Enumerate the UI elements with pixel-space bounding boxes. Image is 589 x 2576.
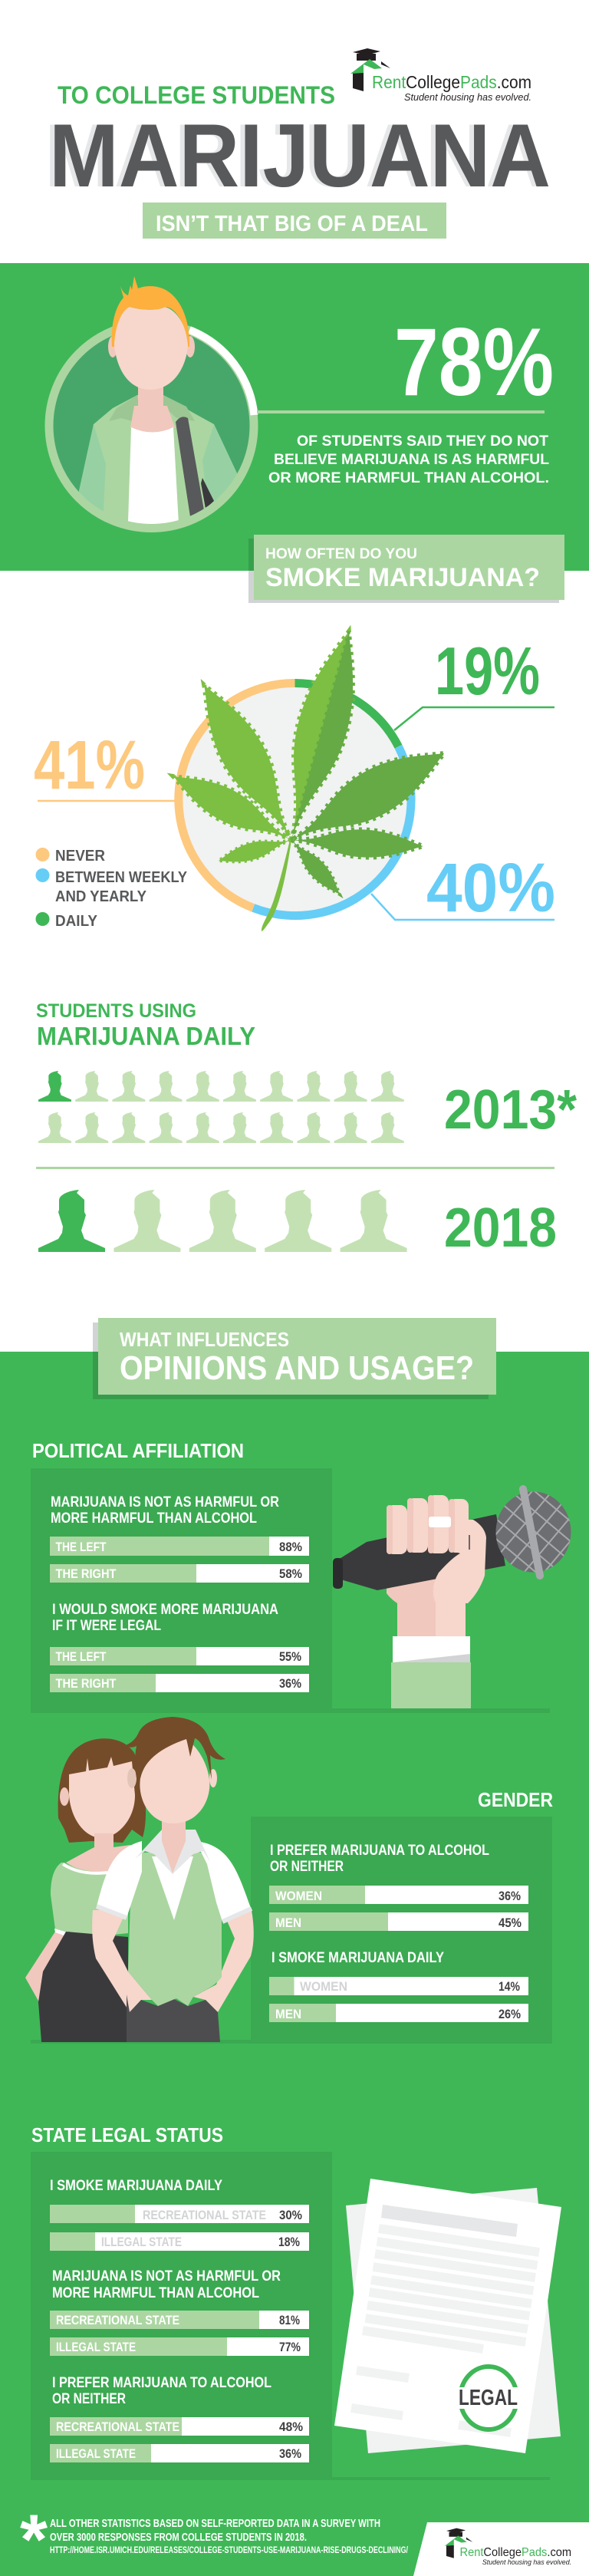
bar: the left 88: 88% <box>279 1540 302 1554</box>
bar: men 45: MEN <box>275 1916 301 1930</box>
pictogram: 2013 one in twenty <box>38 1071 404 1143</box>
stat description: OR MORE HARMFUL THAN ALCOHOL. <box>268 469 549 486</box>
panel: political affiliation <box>31 1439 571 1713</box>
donut segments <box>179 683 411 916</box>
bar: illegal 18 <box>50 2232 309 2251</box>
footer notes <box>20 2501 589 2576</box>
question text: I WOULD SMOKE MORE MARIJUANA <box>52 1602 278 1618</box>
figure: woman <box>25 1738 146 2042</box>
legend: NEVER <box>55 848 106 865</box>
callout: 19% daily <box>394 633 554 730</box>
question text <box>52 1602 278 1634</box>
bar: illegal 77: 77% <box>279 2340 301 2354</box>
bar: men 26: MEN <box>275 2007 301 2021</box>
section banner: what influences: WHAT INFLUENCES <box>120 1328 289 1351</box>
source text: OVER 3000 RESPONSES FROM COLLEGE STUDENTS IN 2018. <box>50 2531 307 2544</box>
bar: illegal 36 <box>50 2444 309 2462</box>
bar: the right 36: 36% <box>279 1676 301 1691</box>
bar: the right 36 <box>50 1674 309 1692</box>
legend <box>35 848 188 930</box>
section banner: what influences <box>93 1318 496 1399</box>
bar: men 26 <box>269 2004 528 2022</box>
bar: the left 88: THE LEFT <box>55 1540 107 1554</box>
question text: I PREFER MARIJUANA TO ALCOHOL <box>52 2375 271 2391</box>
heading: STATE LEGAL STATUS <box>31 2123 223 2146</box>
logo wordmark: RentCollegePads.com <box>372 72 531 92</box>
callout: 40% between weekly and yearly: 40% <box>426 850 555 927</box>
stamp: LEGAL: LEGAL <box>459 2386 518 2410</box>
bar: illegal 77: ILLEGAL STATE <box>56 2340 136 2354</box>
bar: women 36 <box>269 1886 528 1904</box>
bar: illegal 77 <box>50 2337 309 2356</box>
bar: men 26: 26% <box>499 2007 521 2021</box>
bar: illegal 36: 36% <box>279 2446 301 2461</box>
bar: women 36: 36% <box>499 1889 521 1903</box>
big stat 78%: 78% <box>394 309 554 416</box>
year label 2018: 2018 <box>444 1197 557 1259</box>
section banner: how often: HOW OFTEN DO YOU <box>265 546 417 562</box>
year label 2013: 2013* <box>444 1079 577 1141</box>
legend: BETWEEN WEEKLY <box>55 869 188 886</box>
stat description: BELIEVE MARIJUANA IS AS HARMFUL <box>274 451 549 468</box>
question text: OR NEITHER <box>52 2391 126 2407</box>
callout: 40% between weekly and yearly <box>371 850 555 927</box>
question text <box>52 2375 271 2407</box>
eyebrow heading: TO COLLEGE STUDENTS <box>58 81 335 109</box>
question text: I PREFER MARIJUANA TO ALCOHOL <box>270 1843 489 1859</box>
bar: the left 55: THE LEFT <box>55 1649 107 1664</box>
panel: state legal status <box>31 2123 561 2480</box>
section banner: what influences: OPINIONS AND USAGE? <box>120 1349 474 1387</box>
bar: recreational 30: 30% <box>279 2208 302 2222</box>
question text <box>51 1494 279 1527</box>
illustration: legal documents <box>334 2179 561 2453</box>
source text: HTTP://HOME.ISR.UMICH.EDU/RELEASES/COLLEGE-STUDENTS-USE-MARIJUANA-RISE-DRUGS-DECLINING/ <box>50 2546 409 2555</box>
bar: illegal 36: ILLEGAL STATE <box>56 2446 136 2461</box>
heading: POLITICAL AFFILIATION <box>32 1439 244 1462</box>
panel: 78% green section <box>0 263 589 571</box>
main title: MARIJUANA <box>44 105 546 206</box>
illustration: fist holding microphone <box>333 1489 571 1708</box>
stat description: OF STUDENTS SAID THEY DO NOT <box>297 433 548 450</box>
source text <box>50 2517 409 2555</box>
bar: the right 58: 58% <box>279 1566 302 1581</box>
bar: the left 55: 55% <box>279 1649 301 1664</box>
bar: illegal 18: ILLEGAL STATE <box>101 2235 182 2249</box>
illustration: woman and man <box>25 1717 254 2042</box>
heading: STUDENTS USING <box>36 1000 196 1022</box>
bar: women 36: WOMEN <box>275 1889 322 1903</box>
bar: men 45: 45% <box>499 1916 522 1930</box>
heading: GENDER <box>478 1788 553 1811</box>
icon: cannabis leaf <box>166 625 456 931</box>
header section <box>44 48 551 239</box>
question text <box>270 1843 489 1875</box>
subtitle banner <box>143 203 446 239</box>
bar: women 14: 14% <box>499 1979 520 1994</box>
illustration: student portrait <box>49 276 255 537</box>
bar: men 45 <box>269 1912 528 1931</box>
bar: recreational 30: RECREATIONAL STATE <box>143 2208 266 2222</box>
heading: MARIJUANA DAILY <box>37 1022 255 1050</box>
bar: recreational 48: 48% <box>279 2420 303 2434</box>
section banner: how often: SMOKE MARIJUANA? <box>265 563 540 592</box>
chart: donut with cannabis leaf <box>34 625 555 931</box>
question text: MARIJUANA IS NOT AS HARMFUL OR <box>52 2268 281 2284</box>
footer logo block <box>413 2522 589 2576</box>
callout: 19% daily: 19% <box>435 633 540 709</box>
callout: 41% never: 41% <box>34 727 145 804</box>
stat description <box>268 433 549 486</box>
bar: recreational 81 <box>50 2311 309 2329</box>
question text: IF IT WERE LEGAL <box>52 1618 161 1634</box>
question text: I SMOKE MARIJUANA DAILY <box>271 1950 444 1966</box>
question text: OR NEITHER <box>270 1859 344 1875</box>
main title: MARIJUANA <box>49 105 551 206</box>
bar: recreational 81: 81% <box>279 2313 300 2327</box>
bar: women 14: WOMEN <box>300 1979 347 1994</box>
legend: DAILY <box>55 913 98 930</box>
bar: the left 88 <box>50 1537 309 1556</box>
question text: MORE HARMFUL THAN ALCOHOL <box>51 1510 257 1527</box>
logo tagline: Student housing has evolved. <box>404 91 531 103</box>
bar: recreational 81: RECREATIONAL STATE <box>56 2313 179 2327</box>
question text: MORE HARMFUL THAN ALCOHOL <box>52 2285 259 2301</box>
bar: the right 58: THE RIGHT <box>55 1566 117 1581</box>
bar: recreational 48 <box>50 2417 309 2436</box>
question text: I SMOKE MARIJUANA DAILY <box>50 2178 222 2194</box>
question text <box>52 2268 281 2301</box>
bar: the right 58 <box>50 1564 309 1583</box>
source text: ALL OTHER STATISTICS BASED ON SELF-REPORTED DATA IN A SURVEY WITH <box>50 2517 380 2530</box>
bar: the left 55 <box>50 1647 309 1665</box>
logo: RentCollegePads <box>350 48 531 103</box>
subtitle banner: ISN’T THAT BIG OF A DEAL <box>156 212 428 236</box>
heading <box>36 1000 255 1050</box>
footer logo block: Student housing has evolved. <box>482 2558 571 2566</box>
stamp: LEGAL <box>456 2367 521 2429</box>
footer logo block: RentCollegePads.com <box>459 2545 571 2559</box>
pictogram: 2018 one in five <box>38 1190 407 1252</box>
panel: gender <box>25 1717 553 2044</box>
section: students using marijuana daily <box>36 1000 577 1259</box>
question text: MARIJUANA IS NOT AS HARMFUL OR <box>51 1494 279 1510</box>
legend: AND YEARLY <box>55 888 147 905</box>
bar: women 14 <box>269 1977 528 1995</box>
figure: man <box>92 1717 254 2042</box>
section banner: how often <box>248 535 564 603</box>
bar: recreational 48: RECREATIONAL STATE <box>56 2420 179 2434</box>
bar: the right 36: THE RIGHT <box>55 1676 117 1691</box>
bar: recreational 30 <box>50 2205 309 2223</box>
icon: graduation cap house <box>350 48 390 91</box>
background: lower green section <box>0 1352 589 2576</box>
bar: illegal 18: 18% <box>278 2235 300 2249</box>
